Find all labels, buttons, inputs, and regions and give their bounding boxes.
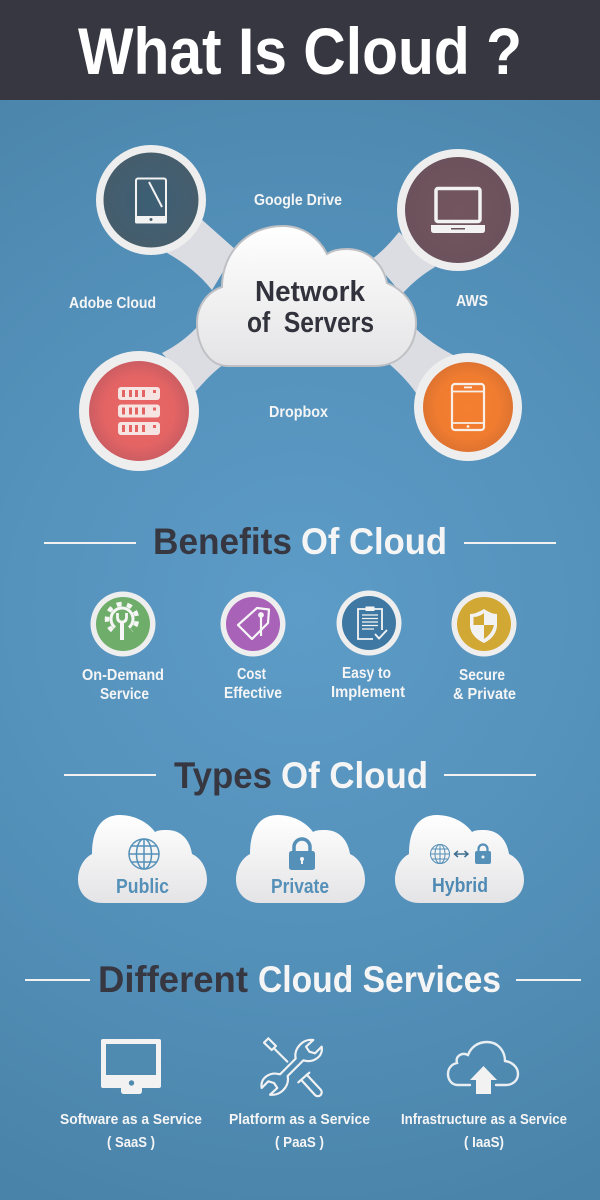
type: public cloud: Public: [116, 876, 169, 898]
icon: gear with wrench: [107, 604, 137, 640]
icon: monitor: [101, 1039, 161, 1094]
heading: services: Cloud Services: [258, 959, 501, 1000]
benefit: cost effective: Cost: [237, 666, 266, 683]
type: private cloud: Private: [271, 876, 329, 898]
service: PaaS: Platform as a Service: [229, 1111, 370, 1128]
heading: types: [64, 755, 536, 796]
icon: shield: [470, 609, 497, 643]
node: mobile device: [414, 353, 522, 461]
label: Dropbox: Dropbox: [269, 404, 328, 421]
benefit: cost effective: Effective: [224, 685, 282, 702]
icon: padlock: [475, 844, 491, 864]
benefit: easy to implement: [331, 590, 405, 701]
central cloud: [197, 226, 416, 366]
heading: services: [25, 959, 581, 1000]
label: Google Drive: Google Drive: [254, 192, 342, 209]
central cloud: of Servers: [247, 307, 374, 339]
benefit: on-demand service: Service: [100, 686, 149, 703]
service: SaaS: [60, 1039, 202, 1151]
heading: services: Different: [98, 959, 248, 1000]
central cloud: Network: [255, 276, 366, 308]
type: public cloud: [78, 815, 207, 903]
icon: crossed tools: [261, 1038, 322, 1096]
service: IaaS: Infrastructure as a Service: [401, 1111, 567, 1128]
icon: clipboard with check: [358, 607, 387, 639]
node: tablet: [96, 145, 206, 255]
benefit: cost effective: [220, 592, 286, 702]
heading: types: Of Cloud: [281, 755, 428, 796]
header banner: [0, 0, 600, 100]
type: private cloud: [236, 815, 365, 903]
node: server: [79, 351, 199, 471]
icon: cloud upload: [448, 1042, 518, 1094]
benefit: on-demand service: [82, 592, 164, 703]
service: IaaS: [401, 1042, 567, 1151]
icon: globe: [430, 844, 450, 864]
icon: globe: [129, 839, 159, 869]
heading: benefits: Benefits: [153, 521, 292, 562]
node: laptop: [397, 149, 519, 271]
connector bands: [162, 218, 453, 393]
icon: two-way arrow: [454, 851, 468, 857]
benefit: easy to implement: Easy to: [342, 665, 391, 682]
type: hybrid cloud: Hybrid: [432, 875, 488, 897]
service: SaaS: ( SaaS ): [107, 1134, 155, 1151]
label: AWS: AWS: [456, 293, 488, 310]
icon: padlock: [289, 839, 315, 870]
network diagram: [69, 145, 522, 471]
heading: benefits: Of Cloud: [301, 521, 447, 562]
service: PaaS: ( PaaS ): [275, 1134, 324, 1151]
icon: price tag: [238, 608, 269, 639]
label: Adobe Cloud: Adobe Cloud: [69, 295, 156, 312]
benefit: on-demand service: On-Demand: [82, 667, 164, 684]
benefit: easy to implement: Implement: [331, 684, 405, 701]
benefit: secure and private: Secure: [459, 667, 505, 684]
service: PaaS: [229, 1038, 370, 1151]
type: hybrid cloud: [395, 815, 524, 903]
benefit: secure and private: & Private: [453, 686, 516, 703]
service: SaaS: Software as a Service: [60, 1111, 202, 1128]
heading: types: Types: [174, 755, 272, 796]
service: IaaS: ( IaaS): [464, 1134, 504, 1151]
title: What Is Cloud ?: [78, 14, 522, 88]
heading: benefits: [44, 521, 556, 562]
benefit: secure and private: [452, 592, 516, 703]
